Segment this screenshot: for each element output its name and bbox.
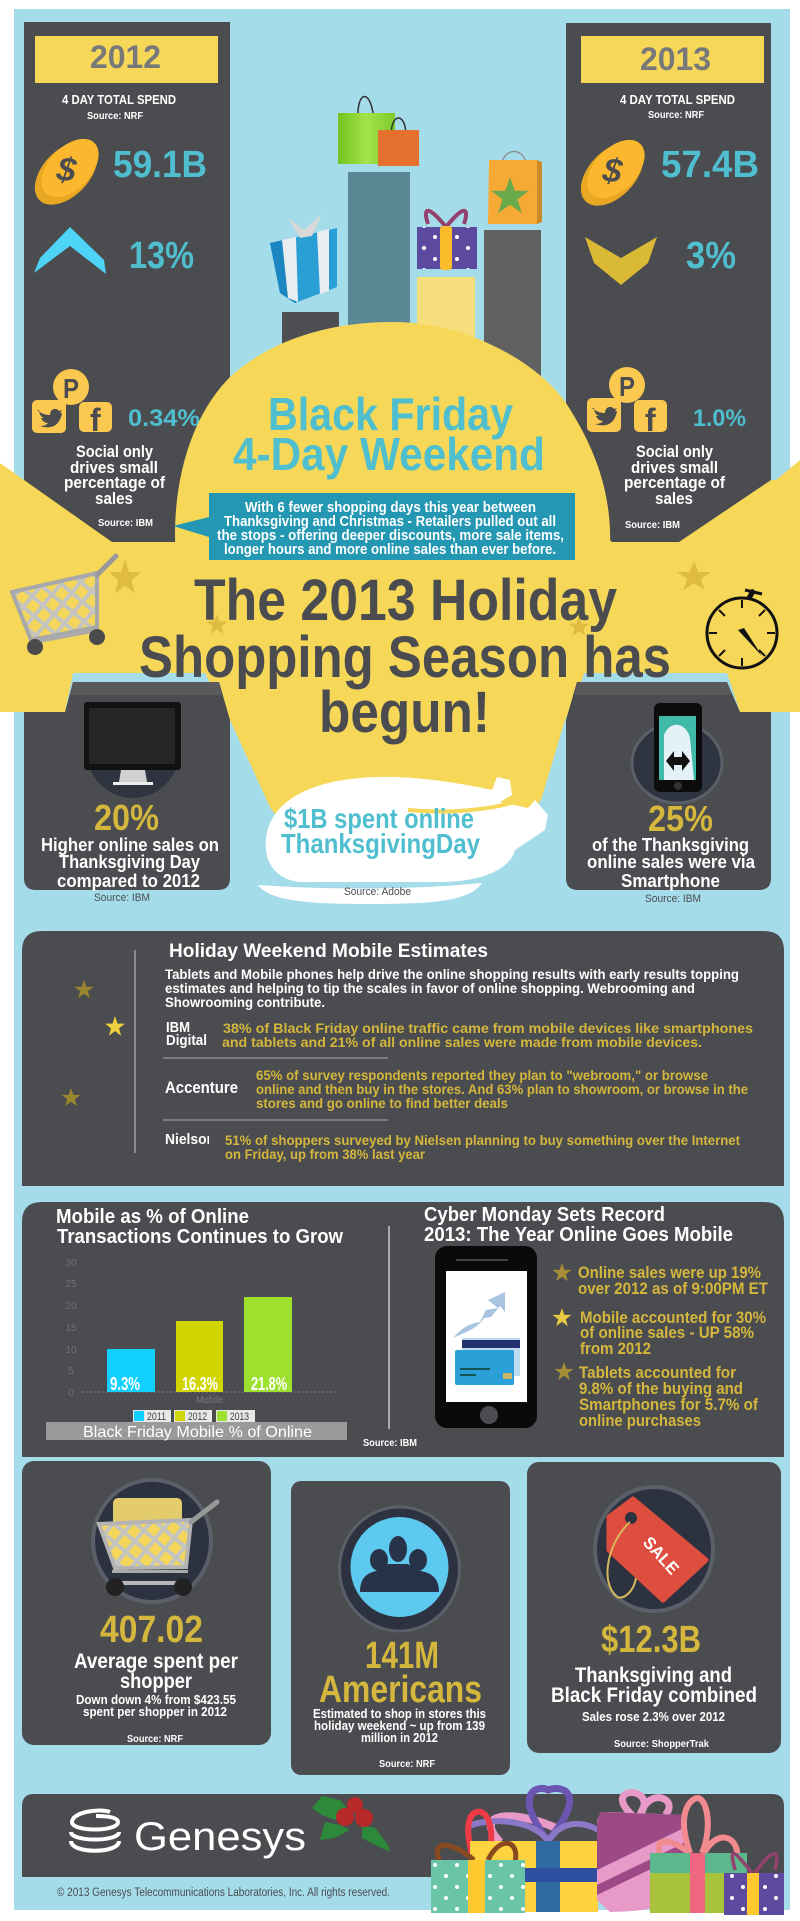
IBM Digital: and tablets and 21% of all online sales were made from mobile devices. bbox=[222, 1034, 702, 1050]
icon: sale tag: SALE bbox=[639, 1533, 683, 1578]
logo: Genesys bbox=[71, 1810, 306, 1859]
source: Source: NRF bbox=[379, 1758, 436, 1770]
bar chart: mobile % of online: 21.8% bbox=[251, 1374, 287, 1394]
stat text: Sales rose 2.3% over 2012 bbox=[582, 1709, 725, 1724]
bar chart: mobile % of online: 10 bbox=[65, 1345, 77, 1356]
panel: 2012 bbox=[23, 22, 230, 542]
icon: gifts bbox=[431, 1788, 784, 1915]
IBM Digital bbox=[166, 1019, 753, 1050]
stat text bbox=[41, 834, 219, 891]
Accenture: Accenture bbox=[165, 1078, 238, 1097]
stat title bbox=[551, 1664, 757, 1707]
Accenture bbox=[165, 1067, 748, 1111]
stat text: of the Thanksgiving bbox=[592, 834, 749, 855]
heading left: Mobile as % of Online bbox=[56, 1206, 249, 1228]
stat text: online sales were via bbox=[587, 851, 756, 872]
chart caption: Black Friday Mobile % of Online bbox=[83, 1424, 312, 1441]
cyber monday facts: Mobile accounted for 30% bbox=[580, 1308, 766, 1327]
icon: stopwatch bbox=[707, 590, 777, 668]
yellow circle bbox=[175, 322, 610, 850]
turkey text: $1B spent online bbox=[284, 803, 474, 834]
stat text: holiday weekend ~ up from 139 bbox=[314, 1718, 485, 1733]
intro text: estimates and helping to tip the scales in favor of online shopping. Webrooming and bbox=[165, 980, 695, 996]
panel: mobile estimates bbox=[22, 931, 784, 1186]
heading: total spend 2012: 4 DAY TOTAL SPEND bbox=[62, 93, 176, 107]
heading left: Transactions Continues to Grow bbox=[57, 1226, 343, 1248]
bar chart: mobile % of online: 25 bbox=[65, 1279, 77, 1290]
cyber monday facts: Online sales were up 19% bbox=[578, 1263, 761, 1282]
callout: With 6 fewer shopping days this year between bbox=[245, 499, 536, 516]
panel: smartphone 25% bbox=[566, 682, 771, 891]
heading right bbox=[424, 1204, 733, 1246]
small purple gift bbox=[724, 1853, 784, 1915]
Accenture: stores and go online to find better deals bbox=[256, 1095, 508, 1111]
Accenture: online and then buy in the stores. And 63% plan to showroom, or browse in the bbox=[256, 1081, 748, 1097]
stat: $12.3B bbox=[601, 1619, 701, 1661]
panel: mobile share and cyber monday bbox=[22, 1202, 784, 1457]
stat text: million in 2012 bbox=[361, 1730, 438, 1745]
icon: social bbox=[587, 367, 667, 438]
social text: sales bbox=[655, 489, 693, 508]
source: Source: NRF bbox=[648, 109, 705, 121]
source: Source: IBM bbox=[645, 893, 701, 905]
panel: thanksgiving sales bbox=[527, 1462, 781, 1753]
icon: phone with cards bbox=[435, 1246, 537, 1428]
bar chart: mobile % of online: 20 bbox=[65, 1301, 77, 1312]
social text: drives small bbox=[631, 458, 718, 477]
cyber monday facts: 9.8% of the buying and bbox=[579, 1379, 743, 1398]
bar chart: mobile % of online: 0 bbox=[68, 1388, 74, 1399]
heading: total spend 2013: 4 DAY TOTAL SPEND bbox=[620, 93, 735, 107]
icon: blue gift bbox=[270, 214, 337, 303]
heading right: 2013: The Year Online Goes Mobile bbox=[424, 1224, 733, 1246]
stat title: Average spent per bbox=[74, 1650, 238, 1673]
icon: turkey bbox=[258, 777, 548, 904]
headline: begun! bbox=[319, 680, 490, 745]
callout: Thanksgiving and Christmas - Retailers pulled out all bbox=[224, 513, 556, 530]
legend bbox=[133, 1410, 255, 1423]
icon: monitor bbox=[84, 702, 181, 798]
social text: percentage of bbox=[64, 473, 165, 492]
Nielsen: Nielson bbox=[165, 1131, 215, 1148]
icon: social: P bbox=[619, 371, 635, 402]
stat title: Thanksgiving and bbox=[575, 1664, 732, 1687]
stat: Americans bbox=[319, 1669, 482, 1711]
stat text bbox=[587, 834, 756, 891]
green gift bbox=[650, 1798, 747, 1913]
teal gift bbox=[431, 1843, 525, 1913]
stat title: shopper bbox=[120, 1670, 192, 1693]
Nielsen bbox=[165, 1131, 740, 1162]
source: Source: ShopperTrak bbox=[614, 1738, 709, 1750]
bar chart: mobile % of online: 16.3% bbox=[182, 1374, 218, 1394]
title: Black Friday: 4-Day Weekend bbox=[233, 428, 545, 480]
panel: footer bbox=[22, 1794, 784, 1877]
heading: Holiday Weekend Mobile Estimates bbox=[169, 941, 488, 962]
change value: 13% bbox=[129, 235, 194, 277]
source: Source: IBM bbox=[94, 892, 150, 904]
cyber monday facts: Smartphones for 5.7% of bbox=[579, 1395, 758, 1414]
stat text: compared to 2012 bbox=[57, 870, 200, 891]
Nielsen: 51% of shoppers surveyed by Nielsen planning to buy something over the Internet bbox=[225, 1132, 740, 1148]
stat: 407.02 bbox=[100, 1609, 203, 1651]
title: Black Friday bbox=[233, 388, 545, 480]
social text: Social only bbox=[76, 442, 153, 461]
Accenture: 65% of survey respondents reported they plan to "webroom," or browse bbox=[256, 1067, 708, 1083]
social value: 1.0% bbox=[693, 405, 746, 432]
icon: people bbox=[340, 1507, 460, 1631]
stat text: Smartphone bbox=[621, 870, 720, 891]
social text: percentage of bbox=[624, 473, 725, 492]
icon: phone bbox=[632, 703, 722, 803]
cyber monday facts: online purchases bbox=[579, 1411, 701, 1430]
chart caption bbox=[46, 1422, 347, 1441]
stat title: Black Friday combined bbox=[551, 1684, 757, 1707]
intro text bbox=[165, 966, 739, 1010]
headline bbox=[139, 568, 671, 745]
cyber monday facts bbox=[578, 1263, 769, 1430]
icon: social: f bbox=[645, 402, 656, 438]
stat text: Thanksgiving Day bbox=[59, 851, 201, 872]
icon: sale tag bbox=[595, 1487, 713, 1611]
stat text: spent per shopper in 2012 bbox=[83, 1704, 227, 1719]
IBM Digital: Digital bbox=[166, 1032, 207, 1049]
IBM Digital: IBM bbox=[166, 1019, 190, 1036]
icon: up arrow bbox=[34, 227, 106, 274]
source: Source: NRF bbox=[87, 110, 144, 122]
icon: social: f bbox=[90, 402, 101, 438]
turkey text bbox=[281, 803, 480, 859]
stat: 141M bbox=[365, 1635, 439, 1677]
social text bbox=[624, 442, 725, 508]
stars bbox=[552, 1263, 574, 1380]
social text bbox=[64, 442, 165, 508]
source: Source: Adobe bbox=[344, 886, 411, 898]
social text: Social only bbox=[636, 442, 713, 461]
icon: down arrow bbox=[585, 237, 657, 285]
stars bbox=[109, 559, 711, 636]
icon: social: P bbox=[63, 373, 79, 404]
callout: longer hours and more online sales than ever before. bbox=[224, 541, 556, 558]
source: Source: IBM bbox=[625, 519, 680, 531]
cyber monday facts: from 2012 bbox=[580, 1339, 651, 1358]
bar chart: mobile % of online: 30 bbox=[65, 1258, 77, 1269]
icon: coin bbox=[23, 128, 109, 216]
callout bbox=[173, 493, 575, 560]
icon: star bag bbox=[488, 152, 542, 224]
pink gift bbox=[597, 1812, 684, 1912]
icon: cart with box bbox=[93, 1480, 217, 1602]
cyber monday facts: Tablets accounted for bbox=[579, 1363, 736, 1382]
year box 2013: 2013 bbox=[640, 41, 711, 77]
stat text: Higher online sales on bbox=[41, 834, 219, 855]
icon: purple gift bbox=[417, 211, 477, 270]
icon: cart bbox=[12, 556, 116, 655]
bar chart: mobile % of online bbox=[65, 1258, 339, 1406]
legend: 2013 bbox=[230, 1411, 249, 1423]
stars bbox=[62, 980, 125, 1106]
intro text: Showrooming contribute. bbox=[165, 994, 325, 1010]
title: Black Friday: Black Friday bbox=[268, 388, 513, 440]
legend: 2012 bbox=[188, 1411, 207, 1423]
year box 2012 bbox=[35, 36, 218, 83]
year box 2013 bbox=[581, 36, 764, 83]
icon: coin bbox=[569, 129, 655, 217]
IBM Digital: 38% of Black Friday online traffic came from mobile devices like smartphones bbox=[223, 1020, 753, 1036]
bar chart: mobile % of online: 9.3% bbox=[110, 1374, 140, 1394]
bar chart: shopping bars bbox=[282, 172, 541, 390]
source: Source: NRF bbox=[127, 1733, 184, 1745]
panel: americans bbox=[291, 1481, 510, 1775]
cyber monday facts: of online sales - UP 58% bbox=[580, 1323, 754, 1342]
source: Source: IBM bbox=[98, 517, 153, 529]
headline: The 2013 Holiday bbox=[194, 568, 617, 633]
social text: drives small bbox=[70, 458, 158, 477]
bar chart: mobile % of online: 5 bbox=[68, 1366, 74, 1377]
icon: social bbox=[32, 369, 112, 438]
stat text: Estimated to shop in stores this bbox=[313, 1706, 486, 1721]
callout: the stops - offering deeper discounts, more sale items, bbox=[217, 527, 564, 544]
stat bbox=[319, 1635, 482, 1711]
yellow gift bbox=[470, 1841, 598, 1912]
turkey text: ThanksgivingDay bbox=[281, 828, 480, 859]
source: Source: IBM bbox=[363, 1437, 417, 1449]
copyright: © 2013 Genesys Telecommunications Laboratories, Inc. All rights reserved. bbox=[57, 1887, 390, 1899]
headline: Shopping Season has bbox=[139, 625, 671, 690]
stat text bbox=[76, 1692, 236, 1719]
cyber monday facts: over 2012 as of 9:00PM ET bbox=[578, 1279, 769, 1298]
icon: green and orange bags bbox=[338, 96, 419, 166]
panel: 2013 bbox=[566, 23, 771, 542]
icon: holly bbox=[312, 1796, 390, 1852]
stat 20%: 20% bbox=[94, 797, 159, 838]
heading left bbox=[56, 1206, 343, 1248]
spend value: 59.1B bbox=[113, 144, 207, 186]
stat text: Down down 4% from $423.55 bbox=[76, 1692, 236, 1707]
year box 2012: 2012 bbox=[90, 39, 161, 75]
yellow ribbon bbox=[0, 460, 800, 712]
bar chart: mobile % of online: Mobile bbox=[196, 1395, 223, 1406]
stat text bbox=[313, 1706, 486, 1745]
legend: 2011 bbox=[147, 1411, 166, 1423]
panel: average spent bbox=[22, 1461, 271, 1745]
stat 25%: 25% bbox=[648, 798, 713, 839]
social text: sales bbox=[95, 489, 133, 508]
panel: online sales 20% bbox=[24, 682, 230, 891]
logo: Genesys: Genesys bbox=[134, 1815, 306, 1859]
heading right: Cyber Monday Sets Record bbox=[424, 1204, 665, 1226]
Nielsen: on Friday, up from 38% last year bbox=[225, 1146, 426, 1162]
change value: 3% bbox=[686, 235, 736, 277]
icon: coin: $ bbox=[53, 150, 80, 190]
stat title bbox=[74, 1650, 238, 1693]
spend value: 57.4B bbox=[661, 144, 759, 186]
intro text: Tablets and Mobile phones help drive the online shopping results with early results topping bbox=[165, 966, 739, 982]
bar chart: mobile % of online: 15 bbox=[65, 1323, 77, 1334]
social value: 0.34% bbox=[128, 405, 200, 432]
icon: coin: $ bbox=[599, 151, 626, 191]
